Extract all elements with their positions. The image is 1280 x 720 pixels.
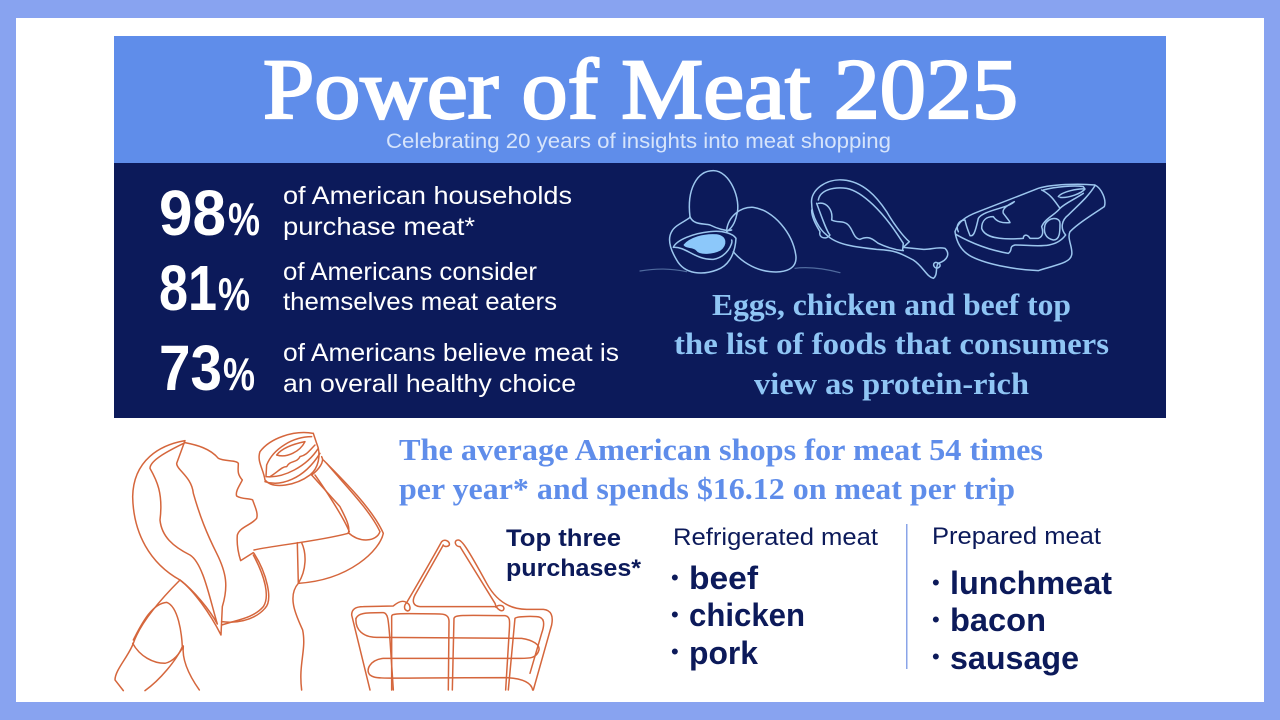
label: top three purchases: purchases* [506,555,642,582]
stat: 98 percent: % [228,193,260,245]
label: top three purchases: Top three [506,525,621,552]
stat: 98 percent: of American households [283,182,572,210]
list: refrigerated meat: pork [689,635,758,671]
stat: 73 percent: of Americans believe meat is [283,339,619,367]
heading: shopping frequency [399,432,1043,506]
stat: 73 percent [159,332,619,404]
list: refrigerated meat: • [671,639,679,664]
illustration: woman eating burger [115,433,383,691]
panel: navy statistics and protein [114,163,1166,418]
stat: 81 percent: themselves meat eaters [283,288,557,316]
protein heading [674,287,1109,401]
icon: burger [259,433,323,485]
protein heading: Eggs, chicken and beef top [712,287,1071,322]
stat: 73 percent: % [223,348,255,400]
heading: shopping frequency: The average American shops for meat 54 times [399,432,1043,467]
stat: 98 percent [159,177,572,249]
illustration: shopping basket [352,540,552,690]
stat: 81 percent [159,252,557,324]
list: refrigerated meat: • [671,602,679,627]
panel: title header [114,36,1166,163]
list: prepared meat: bacon [950,602,1046,638]
stat: 73 percent: an overall healthy choice [283,370,576,398]
stat: 81 percent: % [218,268,250,320]
list: refrigerated meat: chicken [689,597,805,633]
protein heading: view as protein-rich [754,366,1029,401]
icon: chicken drumstick [812,180,948,278]
list: prepared meat: Prepared meat [932,523,1101,550]
list: prepared meat: • [932,570,940,595]
subtitle: Celebrating 20 years of insights into meat shopping [386,130,891,153]
list: refrigerated meat: Refrigerated meat [673,524,878,551]
list: prepared meat [932,523,1112,676]
icon: eggs [640,171,840,273]
list: refrigerated meat: • [671,565,679,590]
list: refrigerated meat: beef [689,560,758,596]
list: prepared meat: sausage [950,640,1079,676]
list: refrigerated meat [671,524,878,671]
heading: shopping frequency: per year* and spends $16.12 on meat per trip [399,471,1015,506]
stat: 98 percent: purchase meat* [283,213,475,241]
label: top three purchases [506,525,642,582]
list: prepared meat: lunchmeat [950,565,1112,601]
protein heading: the list of foods that consumers [674,326,1109,361]
stat: 98 percent: 98 [159,177,226,249]
stat: 81 percent: of Americans consider [283,258,537,286]
title: Power of Meat 2025 [263,41,1018,137]
list: prepared meat: • [932,607,940,632]
list: prepared meat: • [932,644,940,669]
stat: 81 percent: 81 [159,252,217,324]
icon: beef steak [955,184,1105,271]
stat: 73 percent: 73 [159,332,222,404]
